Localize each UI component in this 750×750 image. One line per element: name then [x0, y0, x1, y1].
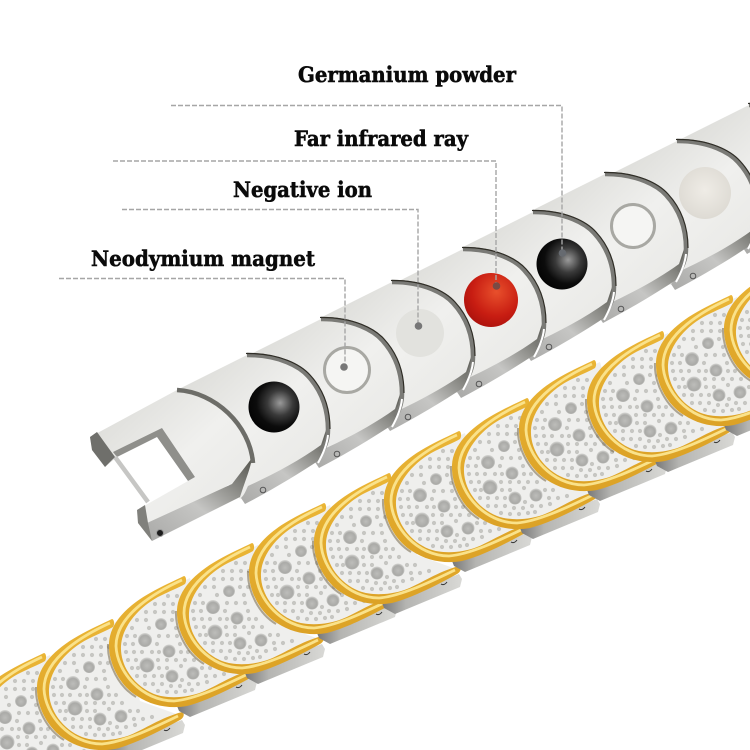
- callout: Neodymium magnet: [59, 247, 348, 371]
- gold link 11: [518, 360, 667, 501]
- gold link 7: [248, 503, 397, 644]
- gold link 13: [655, 295, 750, 436]
- silver link: translucent stone: [322, 280, 475, 431]
- gold link 5: [108, 576, 257, 717]
- callout: Germanium powder: Germanium powder: [298, 63, 517, 88]
- callout: Germanium powder: [171, 63, 566, 257]
- gold and silver dotted bracelet: [0, 260, 750, 750]
- silver link: black stone: [463, 210, 616, 361]
- silver bracelet with mineral stones: [90, 103, 750, 541]
- callout: Neodymium magnet: Neodymium magnet: [91, 247, 315, 272]
- gold link 6: [176, 543, 325, 684]
- gold link 2: [0, 689, 48, 750]
- clasp: [90, 390, 253, 541]
- callout: Far infrared ray: Far infrared ray: [294, 127, 468, 152]
- gold link 10: [451, 398, 600, 539]
- silver link: ring stone: [535, 172, 688, 323]
- callout: Negative ion: Negative ion: [233, 178, 372, 203]
- callout: Far infrared ray: [113, 127, 500, 290]
- silver link: red stone: [393, 247, 546, 398]
- gold link 4: [36, 619, 185, 750]
- silver link: ring stone: [251, 317, 404, 468]
- gold link 14: [723, 260, 750, 401]
- silver link with red edge stone: [679, 103, 750, 254]
- callout: Negative ion: [122, 178, 422, 330]
- gold link 12: [586, 331, 735, 472]
- gold link 3: [0, 653, 117, 750]
- gold link 8: [313, 473, 462, 614]
- gold link 9: [383, 431, 532, 572]
- silver link: pearl stone: [607, 139, 750, 290]
- silver link: black stone: [177, 353, 330, 504]
